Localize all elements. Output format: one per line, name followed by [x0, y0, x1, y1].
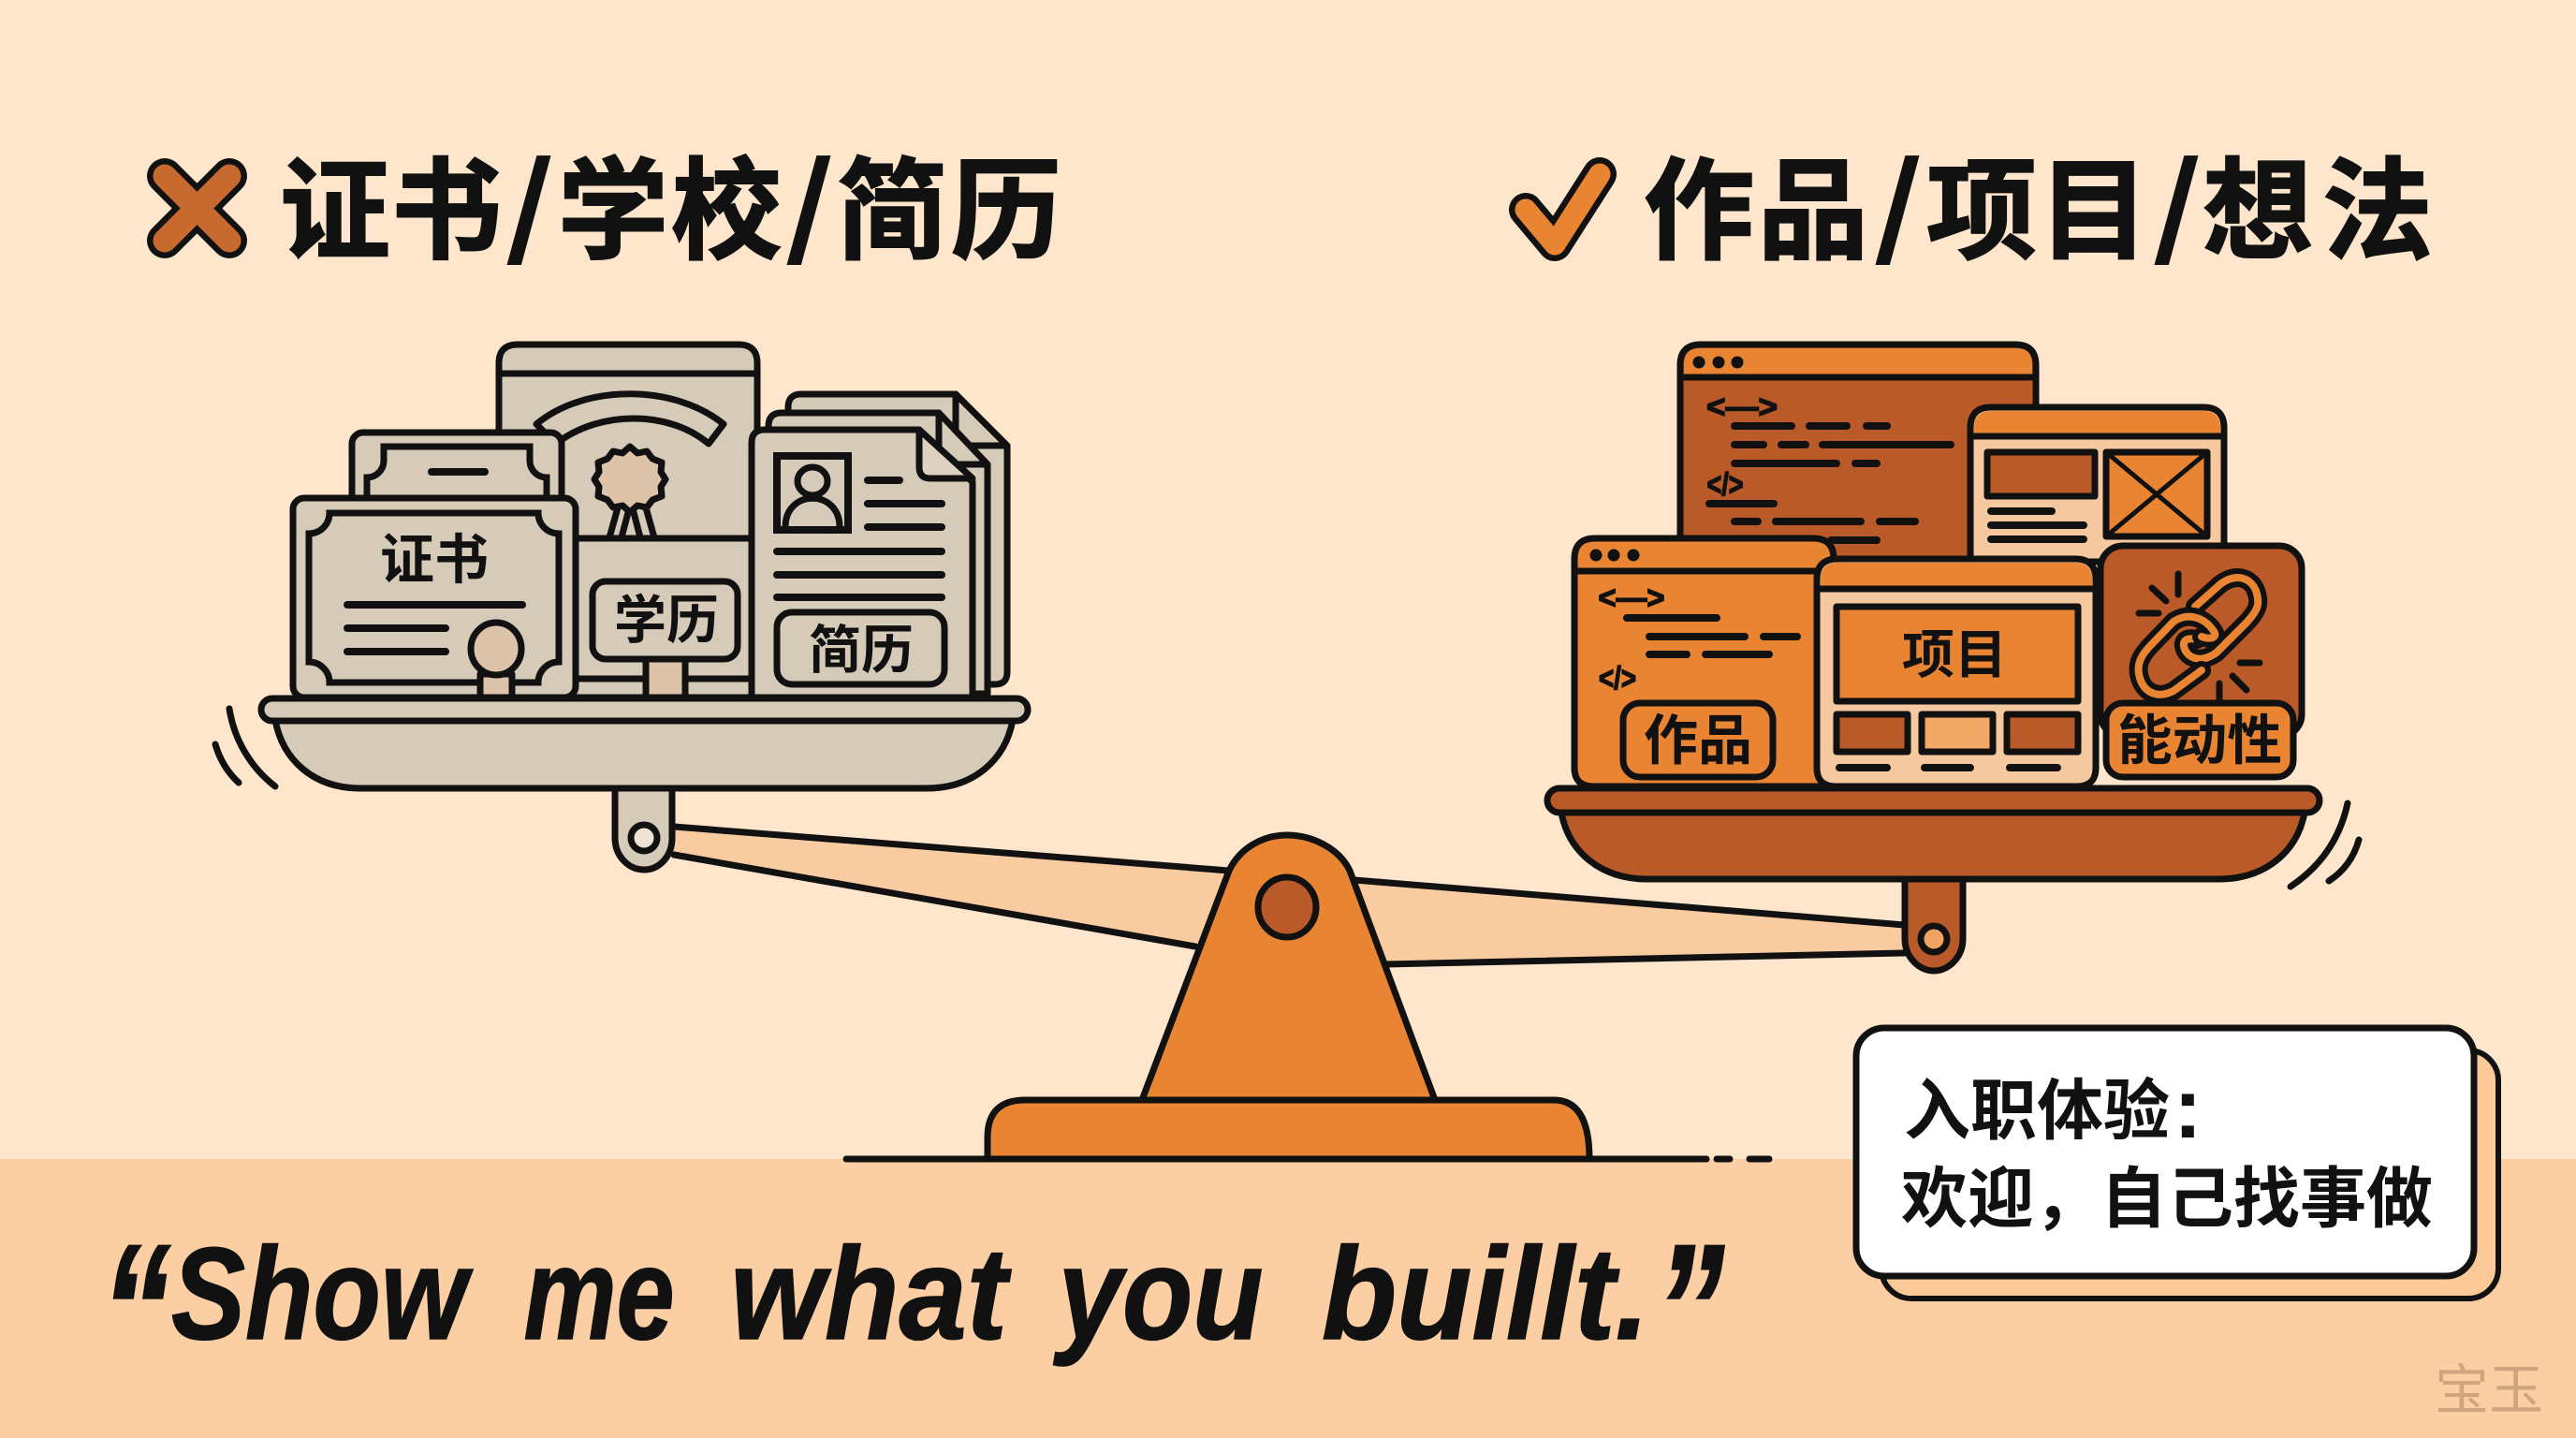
degree panel — [573, 538, 752, 697]
icon: check mark — [1526, 174, 1600, 244]
heading text right: 法 — [2322, 151, 2433, 274]
quote: me — [524, 1220, 674, 1367]
scale base and fulcrum — [846, 835, 1769, 1159]
left pan — [215, 698, 1028, 870]
callout: onboarding experience: : — [2174, 1061, 2203, 1156]
label: degree: 学历 — [614, 591, 719, 650]
heading: works projects ideas — [1526, 131, 2433, 293]
heading: certificates school resume — [165, 131, 1061, 293]
heading text left: 校 — [671, 151, 782, 274]
resume stack — [752, 394, 1007, 697]
heading text left: / — [508, 131, 549, 293]
initiative label: 能动性 — [2117, 711, 2282, 771]
scale beam — [674, 827, 1905, 964]
callout: onboarding experience: 入职体验 — [1904, 1075, 2170, 1149]
resume photo — [777, 456, 848, 530]
heading text right: 项 — [1926, 151, 2037, 274]
quote: Show — [171, 1220, 474, 1367]
project window — [1817, 559, 2096, 786]
heading text right: 目 — [2039, 151, 2149, 274]
code tag close: </> — [1707, 467, 1743, 503]
heading text left: / — [788, 131, 829, 293]
motion lines right — [2291, 803, 2359, 887]
heading text left: 历 — [951, 151, 1061, 274]
label: certificate: 证书 — [380, 530, 489, 591]
right pan — [1547, 788, 2359, 971]
degree sign — [593, 581, 738, 697]
callout: onboarding experience — [1856, 1028, 2498, 1299]
quote: you — [1053, 1220, 1264, 1367]
icon: cross — [165, 176, 229, 241]
heading text left: 书 — [391, 151, 502, 274]
right pile: work — [1574, 345, 2302, 786]
front certificate — [293, 498, 576, 697]
callout: onboarding experience: 欢迎，自己找事做 — [1901, 1163, 2433, 1237]
label: project: 项目 — [1902, 625, 2007, 684]
back certificate with ribbon — [499, 345, 757, 697]
quote: buillt. — [1322, 1220, 1649, 1367]
code tag open: <—> — [1599, 580, 1664, 616]
label: works: 作品 — [1644, 711, 1752, 771]
heading text left: 学 — [558, 151, 668, 274]
code window large — [1680, 345, 2036, 580]
heading text right: / — [2156, 131, 2197, 293]
heading text right: 作 — [1644, 151, 1754, 274]
watermark: 宝玉 — [2435, 1360, 2543, 1421]
code tag close: </> — [1599, 661, 1636, 697]
quote: “ — [101, 1206, 170, 1415]
small back certificate — [352, 433, 562, 517]
motion lines left — [215, 709, 275, 786]
code tag open: <—> — [1706, 389, 1778, 425]
icon: chain link — [2139, 578, 2258, 695]
heading text right: 想 — [2203, 151, 2313, 274]
label: resume: 简历 — [809, 621, 914, 680]
heading text left: 简 — [837, 151, 947, 274]
quote: ” — [1655, 1206, 1724, 1415]
heading text right: / — [1877, 131, 1918, 293]
heading text left: 证 — [280, 151, 390, 274]
heading text right: 品 — [1758, 151, 1868, 274]
wireframe window — [1970, 407, 2224, 562]
initiative panel — [2100, 546, 2302, 737]
quote — [101, 1206, 1724, 1415]
quote: what — [730, 1220, 1012, 1367]
works window — [1574, 538, 1834, 786]
left pile: credentials — [293, 345, 1007, 697]
